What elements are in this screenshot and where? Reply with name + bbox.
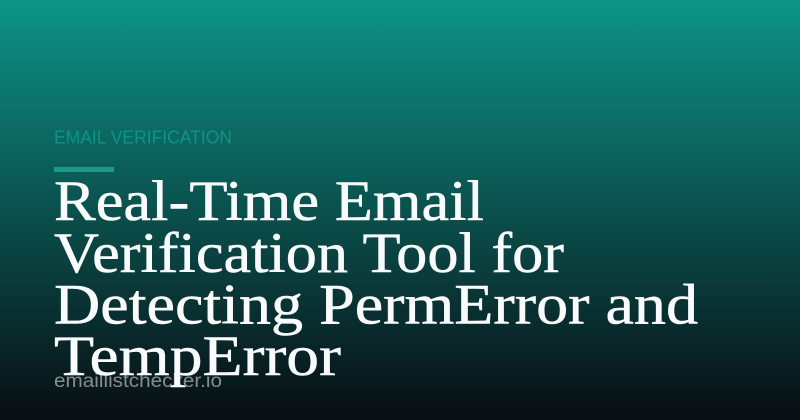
title: Verification Tool for [54,222,564,285]
website footer: emaillistchecker.io [54,371,222,392]
title: TempError [54,325,341,388]
title [54,170,698,388]
title: Real-Time Email [54,170,484,233]
accent bar [54,167,114,172]
category label: EMAIL VERIFICATION [54,128,232,148]
title: Detecting PermError and [54,274,698,336]
